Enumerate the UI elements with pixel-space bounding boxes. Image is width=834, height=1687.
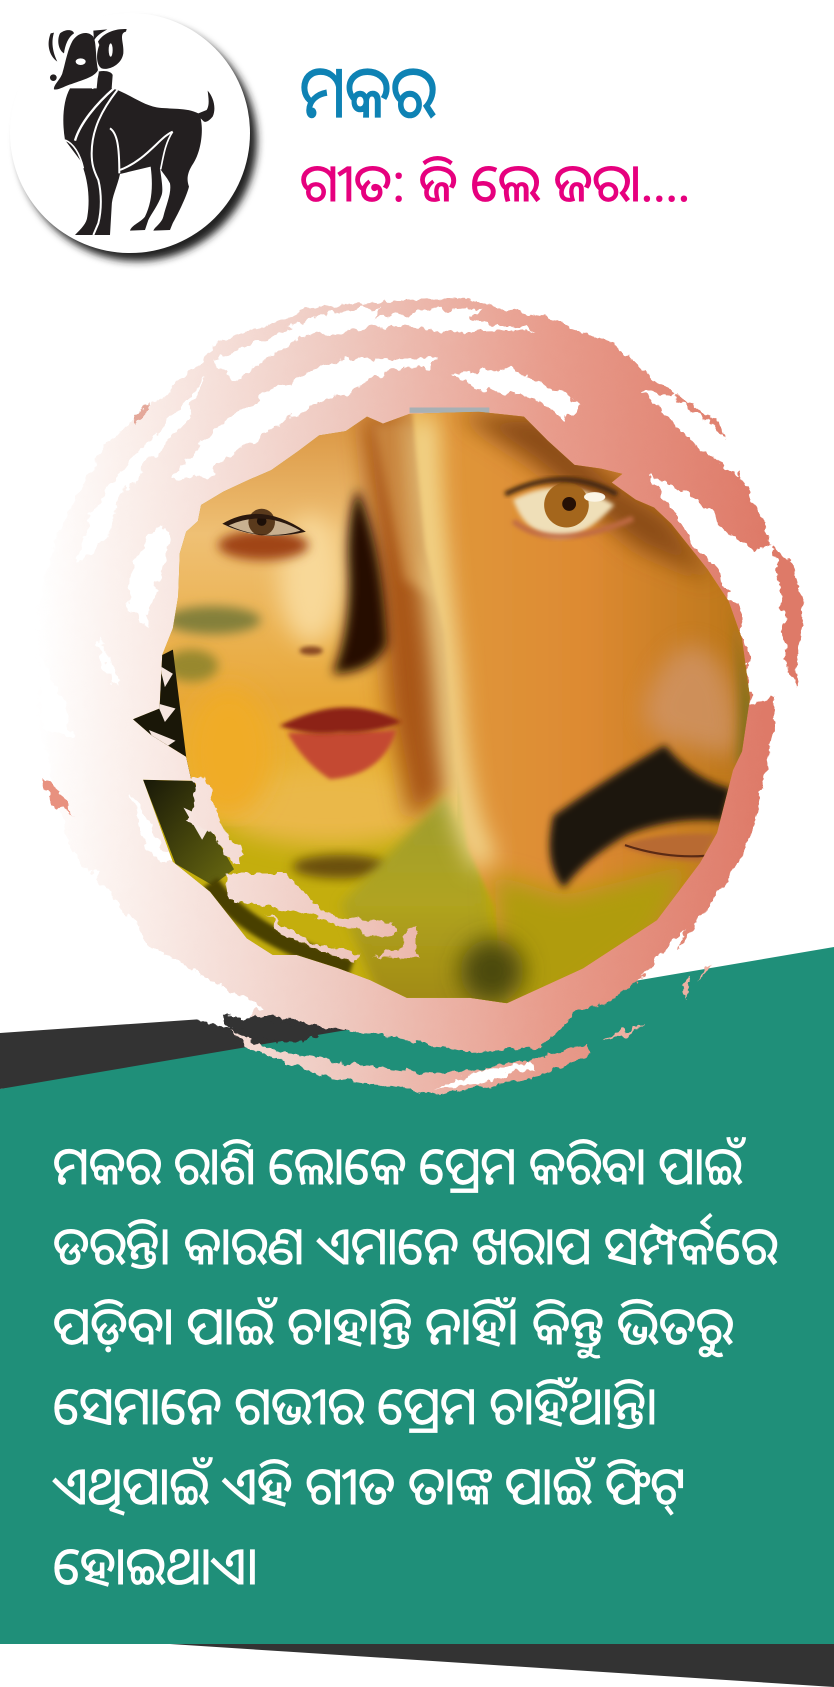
badge disc	[10, 13, 250, 253]
heading: makara: ମକର	[300, 40, 436, 139]
man jaw olive	[495, 864, 691, 1014]
torn ring	[33, 297, 804, 1094]
man nose	[644, 644, 739, 757]
woman forehead glow	[279, 516, 343, 644]
woman cheek shadow	[362, 417, 457, 821]
man forehead shadow	[457, 414, 713, 580]
man eye	[513, 487, 614, 538]
pale flakes on hair	[149, 666, 213, 840]
green text panel	[0, 947, 834, 1644]
pink swirl over photo	[186, 780, 416, 961]
dark hair lower left	[143, 780, 234, 885]
small hat glint	[410, 407, 489, 413]
line 1: ମକର ରାଶି ଲୋକେ ପ୍ରେମ କରିବା ପାଇଁ	[53, 1128, 746, 1200]
body paragraph	[52, 1128, 778, 1600]
subheading: song title: ଗୀତ: ଜି ଲେ ଜରା....	[300, 147, 690, 217]
line 5: ଏଥିପାଇଁ ଏହି ଗୀତ ତାଙ୍କ ପାଇଁ ଫିଟ୍	[52, 1448, 686, 1519]
man lips	[620, 834, 715, 861]
line 2: ଡରନ୍ତି। କାରଣ ଏମାନେ ଖରାପ ସମ୍ପର୍କରେ	[53, 1209, 778, 1279]
man cheek pale edge	[423, 419, 487, 864]
icon: capricorn goat	[49, 29, 214, 235]
line 6: ହୋଇଥାଏ।	[53, 1529, 259, 1600]
dark wedge bottom right	[170, 1644, 834, 1687]
woman eye	[218, 530, 309, 560]
badge shadow	[17, 21, 257, 261]
hair streak	[165, 606, 261, 634]
man face	[412, 409, 761, 1014]
woman lips	[287, 730, 396, 779]
torn circle with photo	[33, 297, 804, 1094]
shirt	[340, 794, 511, 1009]
line 4: ସେମାନେ ଗଭୀର ପ୍ରେମ ଚାହିଁଥାନ୍ତି।	[53, 1369, 658, 1439]
nose shadow	[332, 489, 387, 674]
moustache	[550, 745, 731, 888]
dark and green gap fragments	[221, 1017, 330, 1043]
photo of two faces	[128, 403, 766, 1014]
line 3: ପଡ଼ିବା ପାଇଁ ଚାହାନ୍ତି ନାହିଁ। କିନ୍ତୁ ଭିତରୁ	[53, 1289, 733, 1360]
woman face	[128, 409, 500, 1014]
olive lower band	[210, 883, 351, 968]
white torn shards	[37, 307, 786, 1089]
dark band upper left	[0, 1004, 420, 1089]
woman neck shadow	[293, 855, 388, 878]
zodiac badge	[10, 13, 257, 261]
pink flakes on green	[43, 778, 713, 1040]
